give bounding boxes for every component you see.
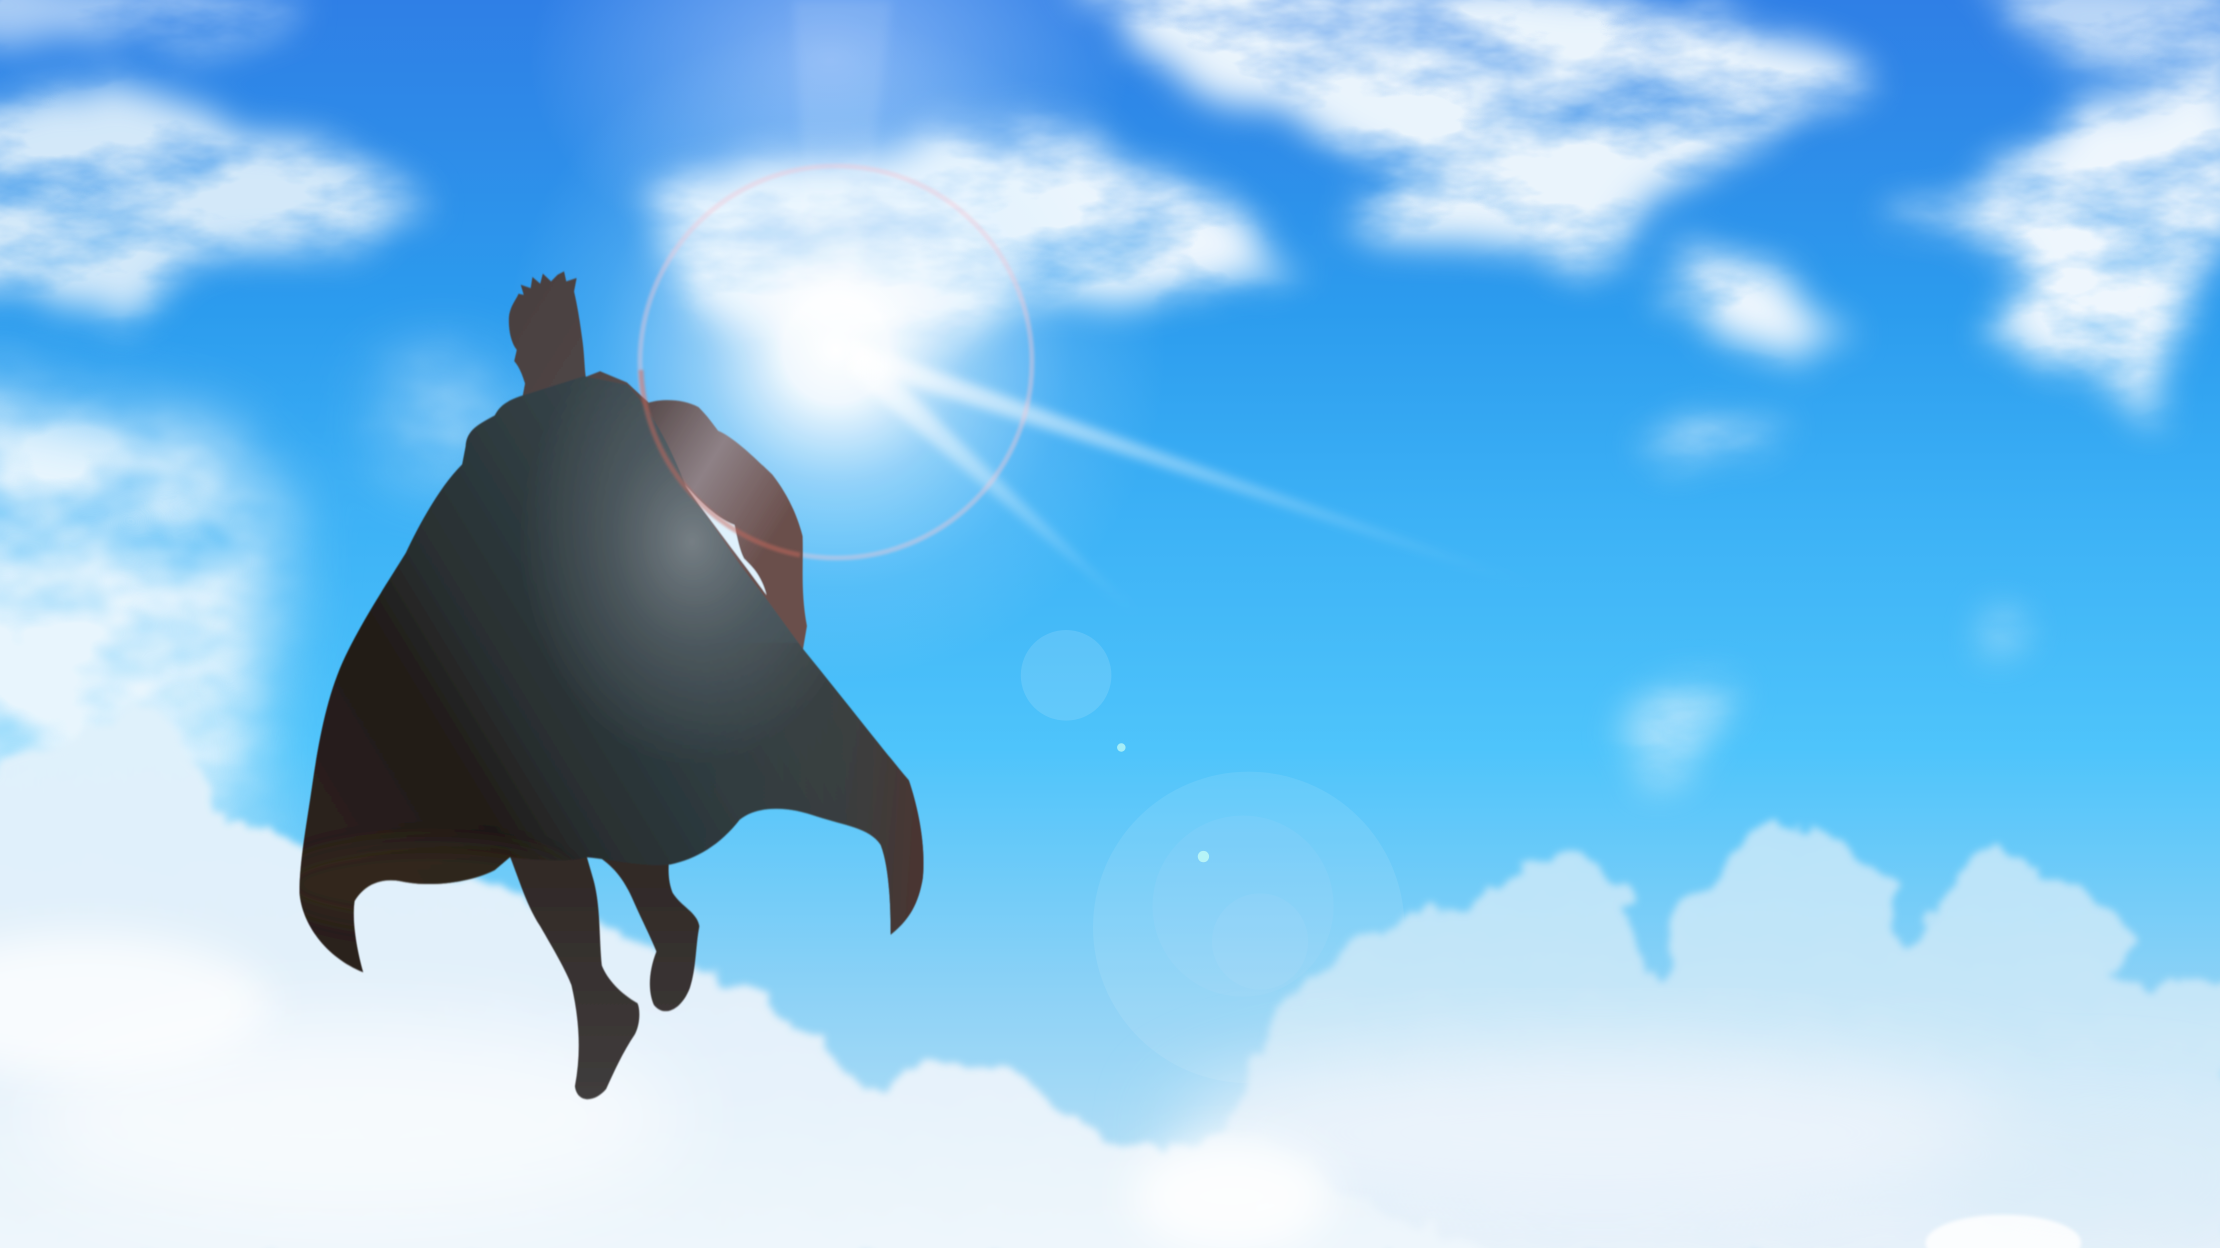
ray: long right (849, 340, 1557, 595)
silhouette: far leg (588, 850, 699, 1011)
silhouette: head and torso (497, 271, 807, 699)
cloud: top right upper (1940, 0, 2220, 99)
cloud: sun cloud sweep (658, 113, 1324, 330)
hero silhouette (280, 271, 939, 1099)
shading: warm lower edge (280, 845, 575, 923)
clouds: bottom highlights (0, 934, 2081, 1248)
silhouette: gap between arm and cape (685, 485, 767, 595)
lens flare ring (640, 166, 1032, 558)
cloud: right (1876, 71, 2220, 418)
cloud: tiny streak (1642, 420, 1791, 457)
cloud: faint puff (1628, 687, 1730, 779)
cloud: upper left (0, 86, 432, 300)
cloud: top left band (0, 0, 297, 48)
clouds: lower right haze (1175, 1048, 2220, 1246)
clouds: upper sky wisps (0, 0, 2220, 779)
sun glow (506, 20, 1166, 680)
shading: light bloom (544, 386, 806, 735)
silhouette: near leg (510, 853, 639, 1099)
clouds: left haze (0, 367, 498, 892)
lens flare ring over figure (641, 370, 800, 555)
sun rays (793, 0, 1557, 623)
cloud: top centre (1076, 0, 1876, 280)
lens flare circles (1021, 630, 1404, 1083)
clouds: lower left bank (0, 705, 1501, 1248)
cloud: small right centre (1649, 272, 1876, 348)
cloud: tiny puff near edge (1985, 600, 2025, 651)
silhouette: cape (300, 376, 924, 972)
ray: lower right (847, 347, 1147, 623)
clouds: lower right bank (1161, 816, 2220, 1248)
shading: warm right side of cape (778, 648, 924, 935)
ray: upward (793, 0, 892, 354)
glow at top of sky above the sun (530, 0, 1130, 280)
silhouette: cape shading overlays (280, 306, 939, 957)
